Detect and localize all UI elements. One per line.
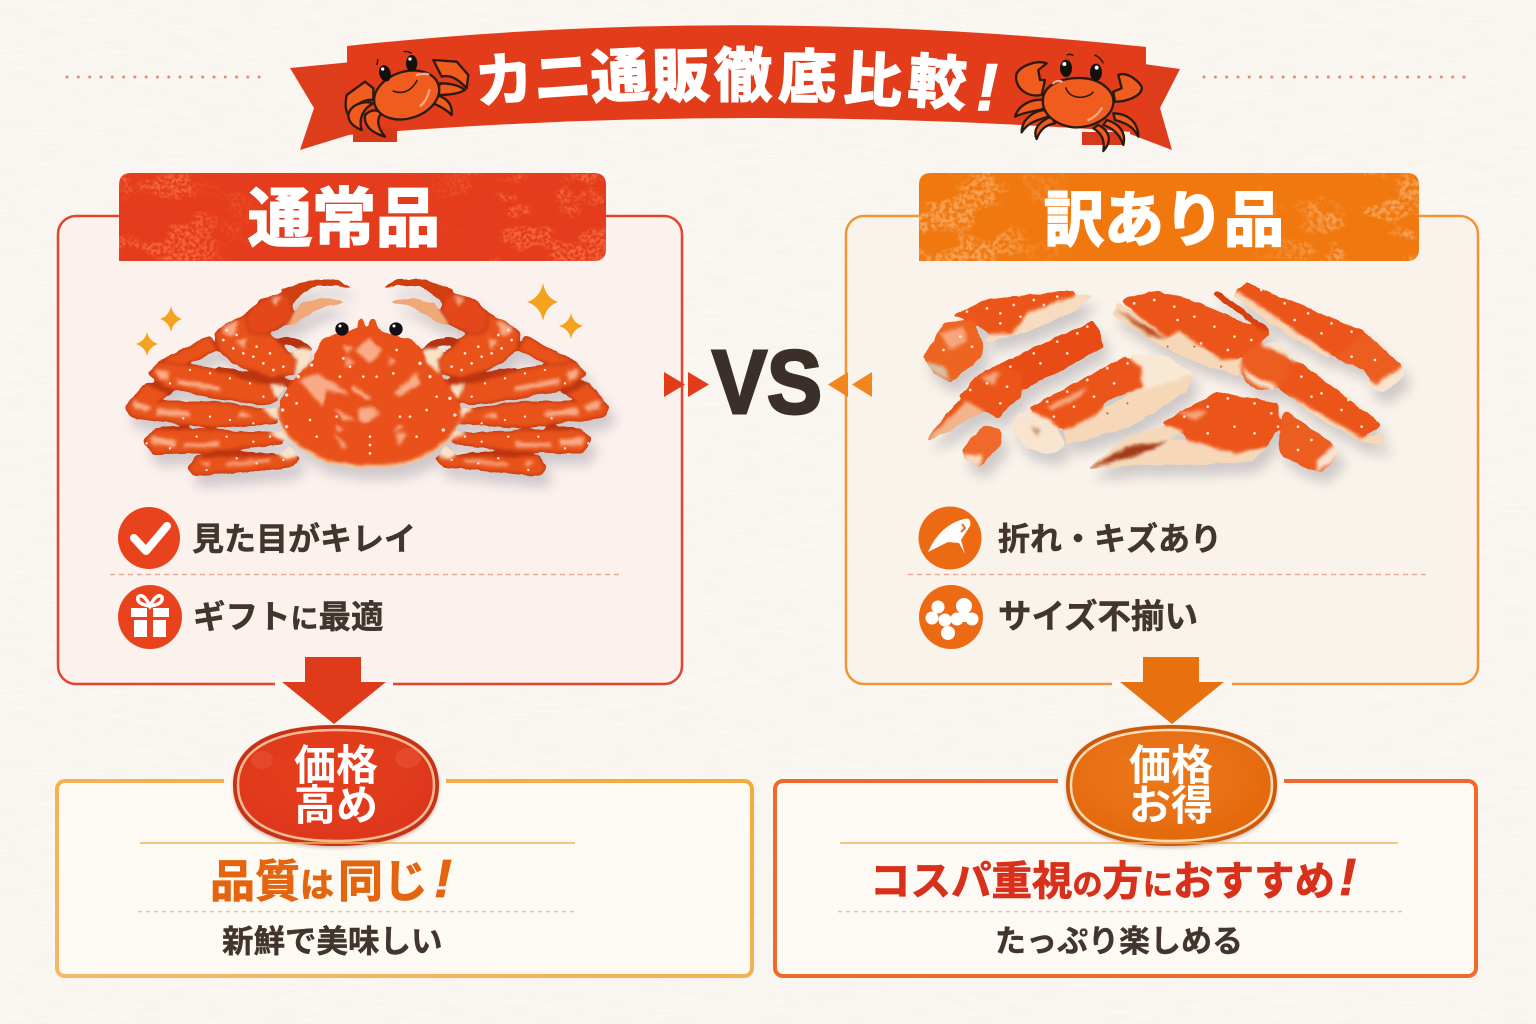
price badge: 価格 [1129, 742, 1213, 789]
box frame [57, 781, 752, 976]
icon: gift [118, 585, 182, 649]
sparkles [136, 283, 583, 356]
feature: looks [118, 507, 416, 569]
arrowheads left of VS [664, 372, 709, 397]
illustration: crab leg pieces [923, 283, 1405, 473]
callout text: たっぷり楽しめる [995, 924, 1243, 959]
title banner [290, 25, 1180, 151]
price badge: お得 [1129, 782, 1213, 829]
icon: check [118, 507, 180, 569]
feature: gift: ギフトに最適 [193, 599, 384, 635]
banner left tail [290, 62, 352, 150]
panel header: 訳あり品 [1044, 187, 1284, 254]
result box: regular [57, 725, 752, 976]
dotted ornament right [1204, 76, 1472, 78]
piece: long upper claw and leg [1112, 291, 1383, 447]
panel frame [846, 216, 1478, 684]
feature: looks: 見た目がキレイ [192, 521, 416, 557]
piece: large pincer [1087, 392, 1281, 468]
price badge [233, 725, 439, 846]
panel header: 通常品 [248, 183, 440, 255]
panel: discounted product [846, 173, 1478, 684]
feature: broken: 折れ・キズあり [998, 521, 1222, 557]
title exclamation: ! [976, 50, 998, 124]
icon: assorted sizes [919, 585, 983, 649]
mini crab right [1015, 54, 1142, 151]
illustration: whole crab [126, 279, 609, 475]
icon: broken claw [918, 506, 982, 570]
panel header [119, 173, 606, 261]
callout heading: コスパ重視の方におすすめ! [870, 849, 1356, 907]
feature: broken [918, 506, 1222, 570]
result box: discounted [775, 725, 1476, 976]
piece: small fragment [962, 425, 1002, 467]
arrow: regular to price [275, 657, 393, 724]
feature: size [919, 585, 1198, 649]
VS label: VS [712, 333, 822, 433]
arrowheads right of VS [828, 372, 872, 397]
piece: broken claw section [1010, 355, 1194, 455]
banner right tail [1130, 62, 1180, 150]
banner title text: カニ通販徹底比較 [472, 43, 969, 118]
piece: knuckle fragment [1278, 410, 1340, 473]
callout heading: 品質は同じ! [210, 849, 452, 909]
piece: orange leg with pincer [923, 320, 1105, 443]
panel header [919, 173, 1419, 261]
price badge: 価格 [294, 742, 378, 789]
box frame [775, 781, 1476, 976]
panel: regular product [58, 173, 682, 684]
callout text: 新鮮で美味しい [222, 923, 443, 959]
panel frame [58, 216, 682, 684]
feature: gift [118, 585, 384, 649]
mini crab left [346, 52, 468, 137]
price badge: 高め [294, 782, 378, 829]
piece: upper left claw section [923, 290, 1094, 382]
banner main ribbon [347, 25, 1146, 135]
feature: size: サイズ不揃い [998, 598, 1198, 636]
piece: upper right leg [1233, 283, 1405, 393]
price badge [1066, 725, 1277, 846]
dotted ornament left [67, 76, 268, 78]
arrow: discounted to price [1112, 657, 1232, 724]
